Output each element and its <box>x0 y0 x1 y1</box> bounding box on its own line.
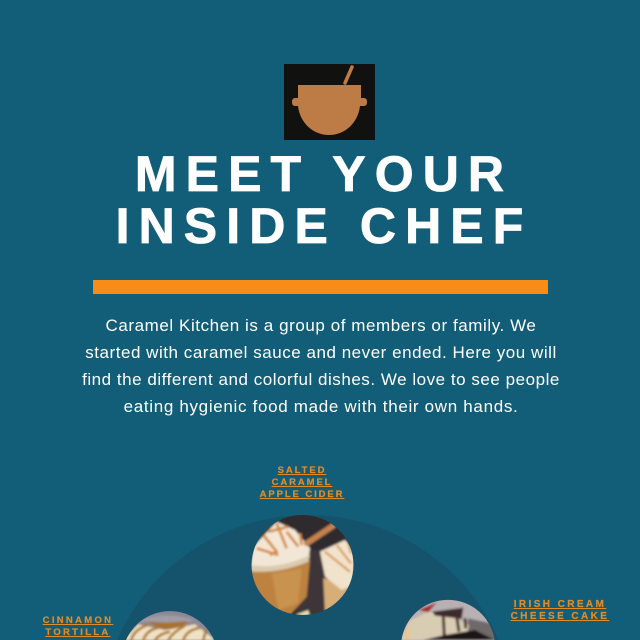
photo: cinnamon tortilla <box>126 611 214 640</box>
photo: salted caramel apple cider <box>250 513 355 617</box>
orange divider bar <box>93 280 548 294</box>
title: INSIDE CHEF <box>116 198 532 254</box>
label: cinnamon tortilla: CINNAMON <box>43 615 113 626</box>
label: irish cream cheese cake: IRISH CREAM <box>514 599 606 610</box>
intro paragraph <box>82 316 560 416</box>
label: salted caramel apple cider <box>260 465 344 500</box>
label: irish cream cheese cake <box>510 599 610 622</box>
intro paragraph: find the different and colorful dishes. We love to see people <box>82 370 560 389</box>
label: salted caramel apple cider: CARAMEL <box>272 477 332 488</box>
dark arc panel <box>117 515 499 640</box>
label: salted caramel apple cider: SALTED <box>278 465 326 476</box>
title: MEET YOUR <box>135 146 513 202</box>
intro paragraph: Caramel Kitchen is a group of members or family. We <box>106 316 536 335</box>
icon: cooking pot <box>284 64 375 140</box>
intro paragraph: eating hygienic food made with their own hands. <box>124 397 518 416</box>
title <box>116 146 532 254</box>
photo: irish cream cheese cake <box>400 598 498 640</box>
background arc and food photos <box>118 515 498 640</box>
label: salted caramel apple cider: APPLE CIDER <box>260 489 344 500</box>
intro paragraph: started with caramel sauce and never ended. Here you will <box>85 343 557 362</box>
label: irish cream cheese cake: CHEESE CAKE <box>511 611 609 622</box>
label: cinnamon tortilla: TORTILLA <box>45 627 111 638</box>
label: cinnamon tortilla <box>42 615 114 638</box>
